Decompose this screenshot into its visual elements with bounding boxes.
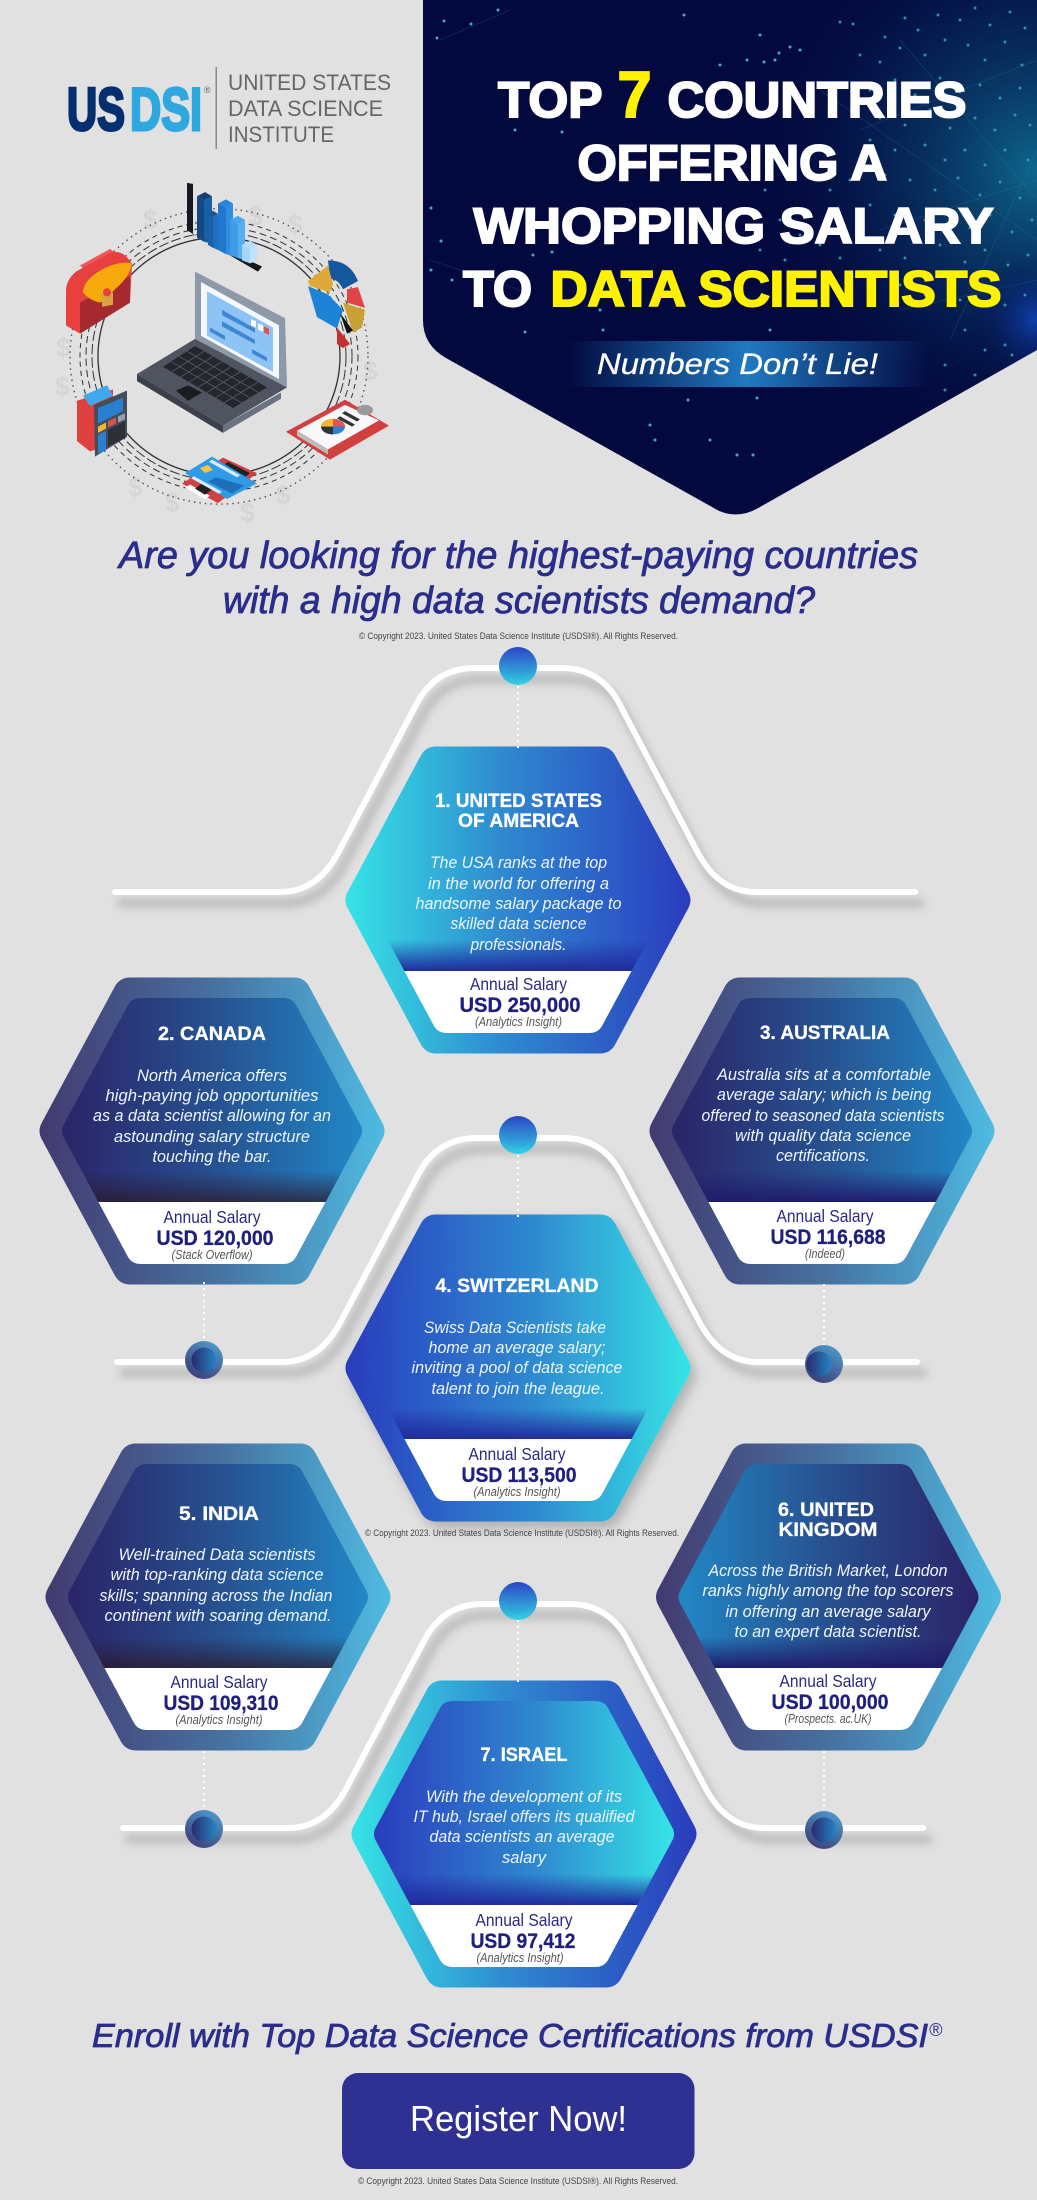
card: 6 United Kingdom: (Prospects. ac.UK)	[784, 1712, 872, 1726]
card: 7 Israel: 7. ISRAEL	[480, 1745, 568, 1766]
subtitle ribbon	[566, 341, 928, 387]
logo: USDSI: US	[67, 76, 125, 143]
node: top	[499, 647, 537, 685]
card: 1 United States of America: (Analytics Insight)	[475, 1015, 562, 1029]
copyright middle: © Copyright 2023. United States Data Science Institute (USDSI®). All Rights Reserved.	[365, 1528, 679, 1539]
dotted connectors from nodes to cards	[204, 686, 824, 1812]
icon: clipboard report	[286, 400, 389, 460]
card: 5 India: USD 109,310	[164, 1692, 278, 1715]
title: TO	[463, 261, 532, 317]
logo: USDSI: DSI	[130, 76, 202, 143]
call to action heading: ®	[929, 2020, 943, 2040]
card: 2 Canada: touching the bar.	[152, 1147, 272, 1166]
card: 3 Australia: USD 116,688	[770, 1226, 886, 1249]
card: 1 United States of America: The USA ranks at the top	[430, 853, 607, 872]
illustration: laptop ringed by finance icons: $	[55, 371, 70, 402]
card: 5 India: 5. INDIA	[179, 1504, 259, 1525]
card: 4 Switzerland: 4. SWITZERLAND	[436, 1276, 598, 1297]
card: 1 United States of America: handsome salary package to	[416, 894, 622, 913]
card: 6 United Kingdom: in offering an average salary	[726, 1602, 932, 1621]
node: United Kingdom	[805, 1811, 843, 1849]
title	[463, 58, 1002, 317]
card: 7 Israel: With the development of its	[426, 1787, 622, 1806]
call to action heading: Enroll with Top Data Science Certifications from USDSI	[92, 2017, 928, 2054]
question heading: with a high data scientists demand?	[223, 580, 816, 622]
icon: laptop	[137, 272, 287, 433]
card: 7 Israel: Annual Salary	[476, 1910, 573, 1930]
title: 7	[618, 58, 652, 131]
node: Canada	[185, 1341, 223, 1379]
card: 7 Israel: salary	[502, 1848, 547, 1867]
card: 2 Canada: 2. CANADA	[158, 1024, 266, 1045]
button: register now: Register Now!	[410, 2098, 627, 2139]
card: 5 India: Annual Salary	[170, 1672, 268, 1692]
card: 7 Israel	[352, 1680, 696, 1988]
card: 2 Canada	[40, 978, 384, 1284]
subtitle ribbon: Numbers Don’t Lie!	[597, 348, 879, 381]
icon: credit cards	[182, 457, 257, 503]
card: 1 United States of America: skilled data science	[450, 914, 586, 933]
logo: USDSI	[67, 67, 391, 149]
card: 3 Australia: Annual Salary	[776, 1206, 874, 1226]
card: 1 United States of America: professionals.	[470, 935, 566, 954]
icon: pie chart	[308, 260, 365, 348]
card: 6 United Kingdom: USD 100,000	[772, 1691, 888, 1714]
card: 4 Switzerland	[346, 1214, 690, 1522]
card: 2 Canada: Annual Salary	[164, 1207, 261, 1227]
track: middle connector	[117, 1138, 923, 1373]
title: OFFERING A	[578, 135, 887, 191]
card: 1 United States of America: USD 250,000	[460, 994, 580, 1017]
illustration: laptop ringed by finance icons: $	[288, 209, 303, 240]
icon: briefcase	[66, 249, 132, 334]
card: 5 India: continent with soaring demand.	[104, 1606, 332, 1625]
question heading: Are you looking for the highest-paying countries	[117, 535, 918, 577]
title: COUNTRIES	[668, 72, 966, 128]
card: 3 Australia	[650, 978, 994, 1284]
banner: navy hexagon header	[423, 0, 1037, 514]
card: 1 United States of America: Annual Salary	[470, 974, 567, 994]
logo: USDSI: INSTITUTE	[228, 122, 334, 147]
card: 4 Switzerland: inviting a pool of data science	[412, 1358, 622, 1377]
card: 3 Australia: with quality data science	[735, 1126, 911, 1145]
card: 4 Switzerland: (Analytics Insight)	[474, 1485, 560, 1499]
card: 3 Australia: Australia sits at a comfortable	[716, 1065, 931, 1084]
card: 7 Israel: data scientists an average	[430, 1827, 614, 1846]
card: 7 Israel: (Analytics Insight)	[476, 1951, 564, 1965]
node: middle	[499, 1116, 537, 1154]
icon: bar chart	[187, 183, 262, 272]
card: 6 United Kingdom: to an expert data scientist.	[734, 1622, 922, 1641]
track: top connector	[115, 668, 921, 903]
illustration: laptop ringed by finance icons: $	[240, 497, 255, 528]
card: 5 India: Well-trained Data scientists	[118, 1545, 316, 1564]
card: 2 Canada: as a data scientist allowing for an	[93, 1106, 331, 1125]
title: TOP	[498, 72, 602, 128]
illustration: laptop ringed by finance icons: $	[128, 471, 143, 502]
copyright bottom: © Copyright 2023. United States Data Science Institute (USDSI®). All Rights Reserved.	[358, 2176, 678, 2187]
card: 5 India: skills; spanning across the Indian	[100, 1586, 332, 1605]
illustration: laptop ringed by finance icons: $	[363, 356, 378, 386]
button: register now	[342, 2073, 694, 2169]
card: 2 Canada: North America offers	[137, 1066, 287, 1085]
card: 6 United Kingdom: Across the British Market, London	[708, 1561, 948, 1580]
card: 4 Switzerland: USD 113,500	[462, 1464, 576, 1487]
illustration: laptop ringed by finance icons: $	[248, 201, 263, 231]
title: WHOPPING SALARY	[474, 198, 994, 254]
card: 3 Australia: 3. AUSTRALIA	[760, 1023, 890, 1044]
card: 2 Canada: (Stack Overflow)	[172, 1248, 252, 1262]
illustration: laptop ringed by finance icons: $	[276, 480, 291, 510]
logo: USDSI: UNITED STATES	[228, 70, 391, 95]
card: 2 Canada: astounding salary structure	[114, 1127, 310, 1146]
card: 2 Canada: high-paying job opportunities	[106, 1086, 319, 1105]
card: 5 India	[46, 1444, 390, 1750]
copyright top: © Copyright 2023. United States Data Science Institute (USDSI®). All Rights Reserved.	[359, 631, 678, 642]
question heading	[117, 535, 918, 622]
card: 4 Switzerland: Swiss Data Scientists take	[424, 1318, 606, 1337]
card: 6 United Kingdom	[656, 1444, 1001, 1750]
card: 4 Switzerland: talent to join the league.	[432, 1379, 604, 1398]
card: 3 Australia: average salary; which is being	[717, 1085, 932, 1104]
card: 2 Canada: USD 120,000	[156, 1227, 274, 1250]
logo: USDSI: ®	[204, 85, 211, 95]
card: 3 Australia: (Indeed)	[805, 1247, 845, 1261]
node: India	[185, 1810, 223, 1848]
illustration: laptop ringed by finance icons: $	[143, 204, 158, 234]
card: 6 United Kingdom: Annual Salary	[780, 1671, 877, 1691]
card: 5 India: (Analytics Insight)	[176, 1713, 262, 1727]
card: 5 India: with top-ranking data science	[110, 1565, 324, 1584]
card: 4 Switzerland: home an average salary;	[428, 1338, 606, 1357]
card: 3 Australia: offered to seasoned data scientists	[702, 1106, 945, 1125]
illustration: laptop ringed by finance icons	[55, 183, 389, 528]
logo: USDSI: DATA SCIENCE	[228, 96, 383, 121]
card: 1 United States of America	[346, 746, 690, 1054]
icon: calculator and book	[77, 385, 127, 457]
illustration: laptop ringed by finance icons: $	[165, 487, 180, 517]
card: 3 Australia: certifications.	[776, 1146, 870, 1165]
illustration: laptop ringed by finance icons: $	[56, 332, 71, 362]
card: 6 United Kingdom: ranks highly among the top scorers	[702, 1581, 954, 1600]
title: DATA SCIENTISTS	[550, 261, 1002, 317]
card: 6 United Kingdom: KINGDOM	[778, 1520, 878, 1541]
card: 4 Switzerland: Annual Salary	[468, 1444, 566, 1464]
node: Australia	[805, 1345, 843, 1383]
card: 6 United Kingdom: 6. UNITED	[778, 1500, 874, 1521]
card: 7 Israel: USD 97,412	[470, 1930, 576, 1953]
card: 1 United States of America: in the world for offering a	[428, 874, 609, 893]
card: 7 Israel: IT hub, Israel offers its qualified	[414, 1807, 635, 1826]
node: bottom	[499, 1582, 537, 1620]
card: 1 United States of America: 1. UNITED STATES	[435, 791, 602, 812]
card: 1 United States of America: OF AMERICA	[458, 811, 579, 832]
track: bottom connector	[123, 1604, 929, 1839]
